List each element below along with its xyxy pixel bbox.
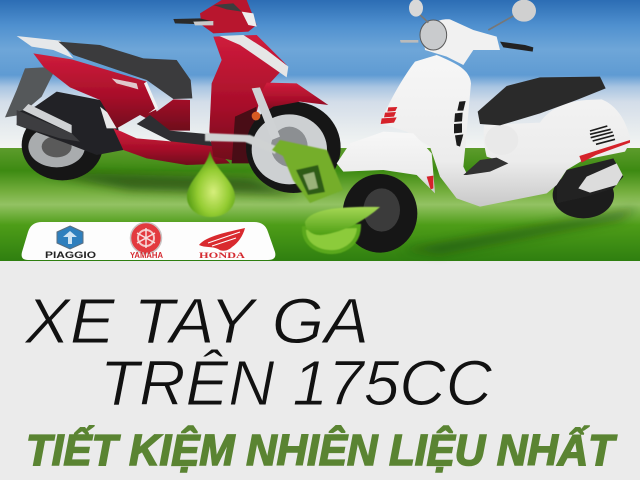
rear vent	[590, 126, 615, 144]
red Honda scooter	[5, 0, 341, 193]
rear mudguard and engine	[5, 67, 123, 155]
fuel nozzle	[272, 140, 343, 203]
Honda logo	[199, 228, 245, 260]
Yamaha logo	[130, 222, 163, 260]
footrest mat	[463, 158, 508, 175]
sky background	[0, 0, 640, 150]
floorboard	[137, 115, 213, 147]
headlight trim	[219, 35, 288, 77]
shield inner shadow	[232, 107, 257, 163]
title line 2: TRÊN 175CC	[100, 347, 493, 419]
mirrors	[409, 0, 536, 30]
seat	[478, 77, 606, 125]
Yamaha logo: YAMAHA	[130, 250, 163, 260]
grass ground	[0, 148, 640, 261]
front fender	[337, 132, 435, 193]
exhaust	[557, 158, 623, 203]
rear body panel	[33, 53, 190, 131]
ground shadows	[40, 172, 640, 254]
front fender and fork	[252, 83, 328, 140]
brand logo panel	[22, 222, 275, 260]
side vents	[454, 101, 466, 147]
handlebar and head	[173, 0, 257, 33]
Piaggio logo	[45, 226, 96, 260]
lower red body	[113, 128, 230, 165]
fuel drop	[187, 151, 235, 217]
Honda logo: HONDA	[199, 251, 245, 260]
white Vespa scooter	[337, 0, 631, 253]
front wheel	[246, 102, 341, 193]
front shield	[209, 35, 287, 163]
front wheel	[343, 174, 417, 253]
Piaggio logo: PIAGGIO	[45, 249, 96, 260]
leaf icon	[304, 207, 380, 252]
seat	[58, 42, 192, 99]
fuel pump hose	[205, 133, 278, 154]
red stripe	[381, 107, 630, 189]
rear body highlight	[485, 125, 518, 155]
rear wheel	[22, 110, 103, 180]
head, headlight and handlebar	[400, 19, 533, 65]
badge and trim	[112, 78, 158, 113]
rear wheel	[553, 172, 614, 218]
tail rack	[17, 36, 73, 58]
green subtitle: TIẾT KIỆM NHIÊN LIỆU NHẤT	[26, 425, 617, 475]
main body	[380, 55, 631, 207]
title line 1: XE TAY GA	[23, 285, 369, 357]
